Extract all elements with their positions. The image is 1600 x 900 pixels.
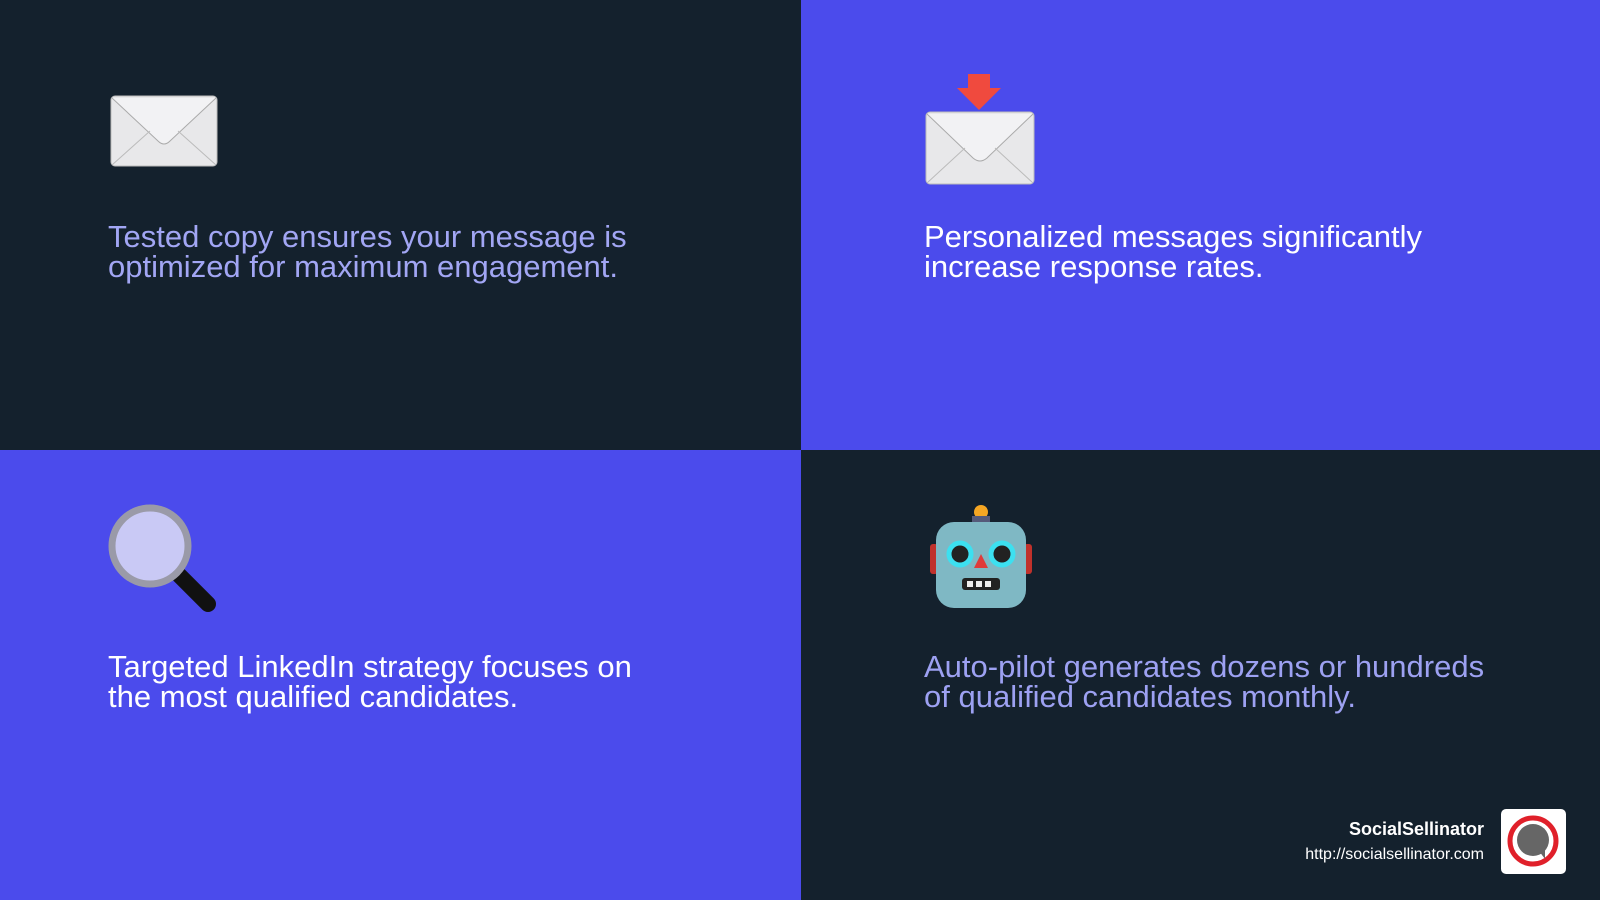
branding [1305, 809, 1566, 874]
panel: targeted strategy [0, 450, 801, 900]
text: tested copy: Tested copy ensures your message is [108, 219, 627, 254]
panel: tested copy [0, 0, 801, 450]
text: tested copy [108, 219, 627, 284]
icon: envelope [110, 96, 218, 166]
text: tested copy: optimized for maximum engagement. [108, 249, 618, 284]
brand url: http://socialsellinator.com [1305, 846, 1484, 863]
text: auto-pilot: Auto-pilot generates dozens or hundreds [924, 649, 1484, 684]
text: targeted: Targeted LinkedIn strategy focuses on [108, 649, 632, 684]
logo [1501, 809, 1566, 874]
icon: incoming envelope [926, 74, 1034, 184]
text: targeted [108, 649, 632, 714]
text: personalized [924, 219, 1422, 284]
icon: robot [930, 505, 1032, 608]
text: personalized: Personalized messages significantly [924, 219, 1422, 254]
panel: auto-pilot [801, 450, 1600, 900]
text: personalized: increase response rates. [924, 249, 1263, 284]
brand name: SocialSellinator [1349, 819, 1484, 839]
icon: magnifying glass [108, 504, 216, 612]
text: auto-pilot [924, 649, 1484, 714]
text: targeted: the most qualified candidates. [108, 679, 518, 714]
text: auto-pilot: of qualified candidates monthly. [924, 679, 1356, 714]
panel: personalized messages [801, 0, 1600, 450]
